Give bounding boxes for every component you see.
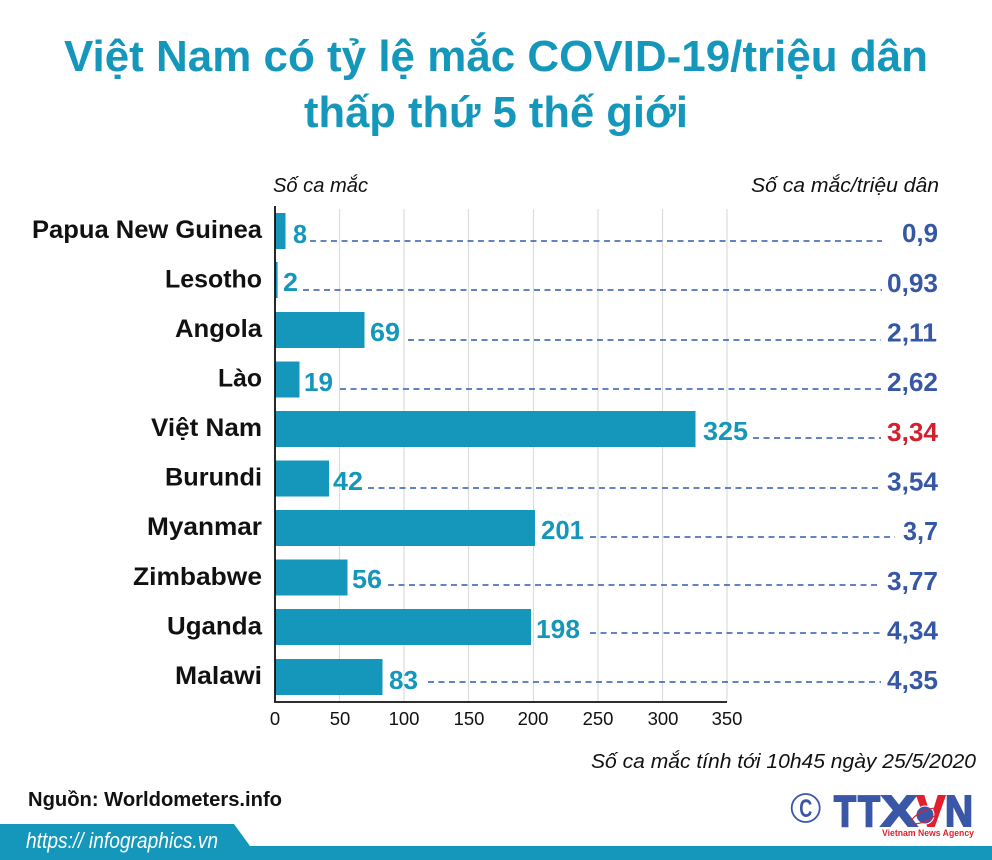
title: Việt Nam có tỷ lệ mắc COVID-19/triệu dân xyxy=(64,31,928,81)
icon: copyright: C xyxy=(799,795,812,823)
row: Myanmar xyxy=(147,510,938,546)
row: Uganda: Uganda xyxy=(167,612,263,640)
axis tick labels: 200 xyxy=(518,708,548,729)
axis tick labels: 0 xyxy=(270,708,280,729)
row: Lesotho xyxy=(165,262,938,298)
row: Burundi xyxy=(165,460,939,496)
row: Zimbabwe: 56 xyxy=(352,564,382,594)
row: Angola: 69 xyxy=(370,317,400,347)
row: Burundi: 42 xyxy=(333,466,363,496)
row: Uganda: 4,34 xyxy=(887,616,939,646)
row: Papua New Guinea: 0,9 xyxy=(902,218,938,248)
row: Papua New Guinea: 8 xyxy=(293,219,307,249)
row: Burundi: Burundi xyxy=(165,464,262,492)
row: Việt Nam xyxy=(151,411,939,447)
row: Lesotho: 0,93 xyxy=(887,268,938,298)
row: Malawi xyxy=(175,659,938,695)
axes xyxy=(275,206,727,702)
axis tick labels: 250 xyxy=(583,708,613,729)
row: Việt Nam: 325 xyxy=(703,416,748,446)
axis tick labels: 50 xyxy=(330,708,350,729)
logo: TTXVN: T xyxy=(858,787,880,836)
row: Malawi: Malawi xyxy=(175,662,262,690)
row: Lào: Lào xyxy=(218,364,262,392)
logo: TTXVN: T xyxy=(834,787,856,836)
row: Papua New Guinea: Papua New Guinea xyxy=(32,216,263,244)
row: Papua New Guinea xyxy=(32,213,938,249)
row: Việt Nam: Việt Nam xyxy=(151,414,262,442)
row: Angola: 2,11 xyxy=(887,318,937,348)
row: Lào: 19 xyxy=(304,367,333,397)
source: Nguồn: Worldometers.info xyxy=(28,789,282,811)
footer band xyxy=(0,824,992,860)
logo: TTXVN: V xyxy=(917,787,946,836)
icon: copyright xyxy=(792,794,820,823)
logo: TTXVN: N xyxy=(945,787,973,836)
row: Burundi: 3,54 xyxy=(887,466,939,496)
bar chart xyxy=(32,206,939,729)
row: Lào xyxy=(218,362,938,398)
row: Myanmar: 3,7 xyxy=(903,516,938,546)
logo: TTXVN xyxy=(834,787,974,838)
row: Zimbabwe: 3,77 xyxy=(887,566,938,596)
row: Malawi: 4,35 xyxy=(887,665,938,695)
right column heading: Số ca mắc/triệu dân xyxy=(751,174,939,197)
row: Myanmar: Myanmar xyxy=(147,513,262,541)
axis tick labels: 150 xyxy=(454,708,484,729)
row: Lesotho: Lesotho xyxy=(165,266,262,294)
row: Zimbabwe xyxy=(133,560,938,596)
row: Lào: 2,62 xyxy=(887,367,938,397)
axis tick labels: 350 xyxy=(712,708,742,729)
axis tick labels xyxy=(270,708,742,729)
axis tick labels: 300 xyxy=(648,708,678,729)
row: Uganda: 198 xyxy=(536,614,580,644)
axis tick labels: 100 xyxy=(389,708,419,729)
title: thấp thứ 5 thế giới xyxy=(304,88,688,137)
row: Lesotho: 2 xyxy=(283,267,298,297)
title xyxy=(64,31,928,137)
row: Myanmar: 201 xyxy=(541,515,584,545)
left column heading: Số ca mắc xyxy=(273,174,368,197)
row: Malawi: 83 xyxy=(389,665,418,695)
logo: TTXVN: Vietnam News Agency xyxy=(882,828,974,838)
row: Angola: Angola xyxy=(175,315,263,343)
row: Angola xyxy=(175,312,937,348)
row: Zimbabwe: Zimbabwe xyxy=(133,563,262,591)
date note: Số ca mắc tính tới 10h45 ngày 25/5/2020 xyxy=(591,750,976,773)
row: Việt Nam: 3,34 xyxy=(887,417,939,447)
footer url: https:// infographics.vn xyxy=(26,828,218,853)
row: Uganda xyxy=(167,609,939,646)
logo: TTXVN: X xyxy=(881,787,917,836)
